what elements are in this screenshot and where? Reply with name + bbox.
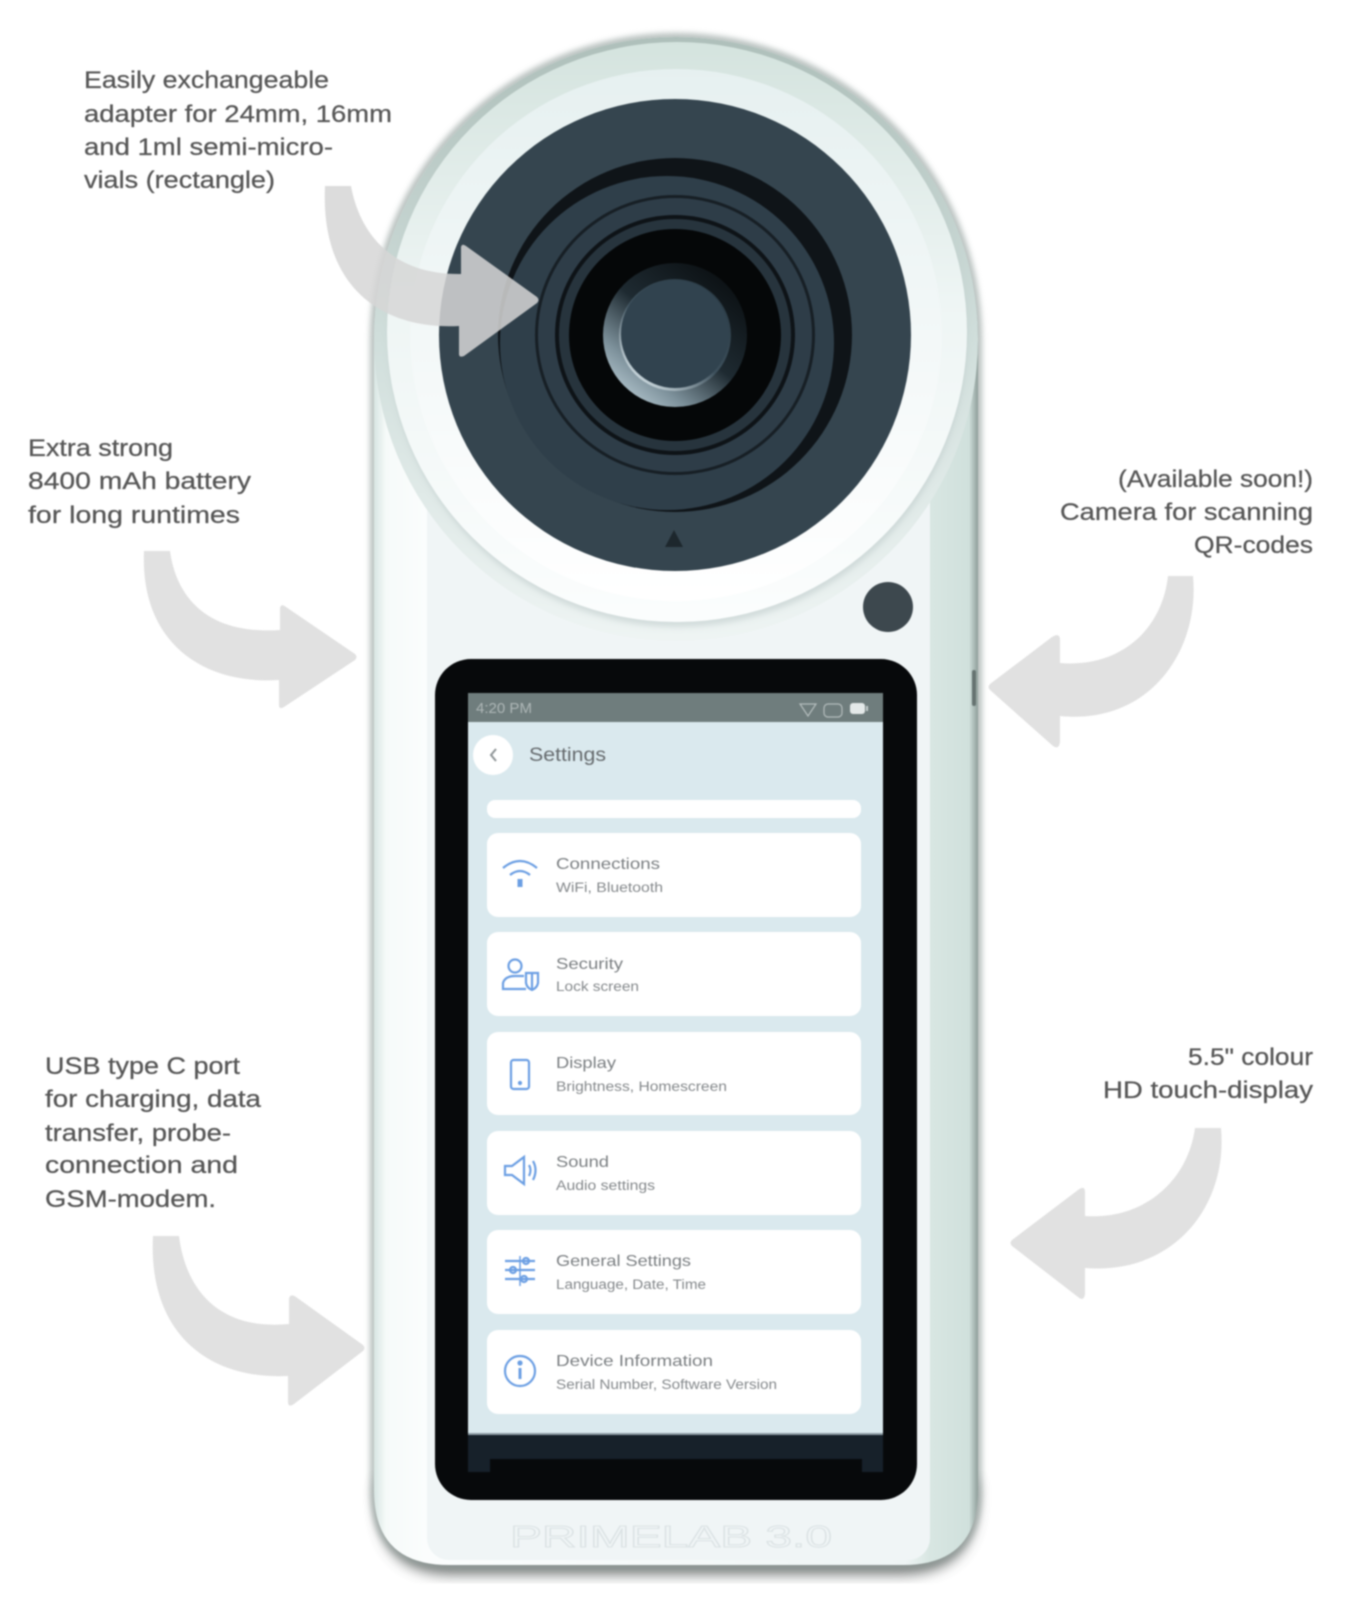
callout: battery: Extra strong [28, 435, 173, 462]
touch display [435, 659, 917, 1500]
callout: usb port: connection and [45, 1152, 238, 1179]
callout: adapter: vials (rectangle) [84, 167, 275, 194]
callout: adapter: Easily exchangeable [84, 67, 329, 94]
arrow: battery [144, 551, 356, 708]
card: general settings: Language, Date, Time [556, 1277, 706, 1292]
card: general settings [487, 1230, 861, 1314]
device [370, 33, 982, 1574]
status icons [800, 703, 868, 717]
card: display: Display [556, 1055, 616, 1072]
side port [972, 670, 976, 706]
status bar [468, 693, 883, 722]
icon: speaker [505, 1157, 536, 1184]
partial settings card [487, 800, 861, 818]
lens glass ring [603, 263, 747, 407]
card: connections [487, 833, 861, 917]
lens centre [619, 279, 731, 391]
icon: info [505, 1356, 535, 1386]
card: security: Security [556, 956, 623, 973]
callout: battery: for long runtimes [28, 502, 240, 529]
card: display [487, 1032, 861, 1115]
device body [374, 37, 978, 1565]
screen bottom edge [468, 1433, 883, 1435]
callout: camera: (Available soon!) [1118, 466, 1313, 493]
callout: camera: QR-codes [1194, 532, 1313, 559]
head rim [374, 37, 978, 641]
screen lower glass [468, 1434, 883, 1472]
arrow: usb port [153, 1236, 364, 1406]
card: device information: Serial Number, Software Version [556, 1377, 777, 1392]
callout: adapter [84, 67, 392, 194]
device shadow [378, 1480, 976, 1574]
callout: display: HD touch-display [1103, 1077, 1313, 1104]
icon: user shield [503, 960, 538, 990]
arrow: camera [988, 576, 1194, 747]
callout: adapter: adapter for 24mm, 16mm [84, 101, 392, 128]
icon: wifi [503, 861, 537, 887]
card: sound [487, 1131, 861, 1215]
screen heading: Settings [529, 745, 606, 766]
card: security: Lock screen [556, 979, 639, 994]
icon: sliders [505, 1256, 535, 1286]
card: sound: Sound [556, 1154, 609, 1171]
callout: camera [1060, 466, 1313, 559]
card: connections: Connections [556, 856, 660, 873]
icon: phone [511, 1060, 529, 1089]
callout: battery [28, 435, 251, 529]
front panel [427, 480, 930, 1560]
camera button [863, 582, 913, 632]
callout: usb port: GSM-modem. [45, 1186, 216, 1213]
callout: usb port: for charging, data [45, 1086, 262, 1113]
card: display: Brightness, Homescreen [556, 1079, 727, 1094]
callout: battery: 8400 mAh battery [28, 468, 251, 495]
lens ring highlight [410, 69, 942, 601]
card: device information: Device Information [556, 1353, 713, 1370]
card: sound: Audio settings [556, 1178, 655, 1193]
lens ring [387, 42, 967, 622]
screen background [468, 693, 883, 1434]
callout: camera: Camera for scanning [1060, 499, 1313, 526]
ring shadow [389, 49, 967, 627]
alignment triangle [665, 530, 683, 547]
back button [473, 735, 513, 775]
arrow: display [1010, 1128, 1222, 1299]
callout: usb port: USB type C port [45, 1053, 240, 1080]
card: connections: WiFi, Bluetooth [556, 880, 663, 895]
lens housing [439, 99, 911, 571]
callout: usb port [45, 1053, 262, 1213]
device body side shadow [370, 33, 982, 1568]
card: general settings: General Settings [556, 1253, 691, 1270]
arrow: adapter [325, 186, 538, 357]
callout: adapter: and 1ml semi-micro- [84, 134, 333, 161]
callout: display [1103, 1044, 1313, 1104]
card: device information [487, 1330, 861, 1414]
device brand name: PRIMELAB 3.0 [510, 1519, 832, 1554]
status time: 4:20 PM [476, 700, 532, 717]
lens dark crescent [498, 158, 852, 512]
bezel [435, 659, 917, 1500]
callout: usb port: transfer, probe- [45, 1120, 231, 1147]
callout: display: 5.5" colour [1188, 1044, 1313, 1071]
card: security [487, 932, 861, 1016]
